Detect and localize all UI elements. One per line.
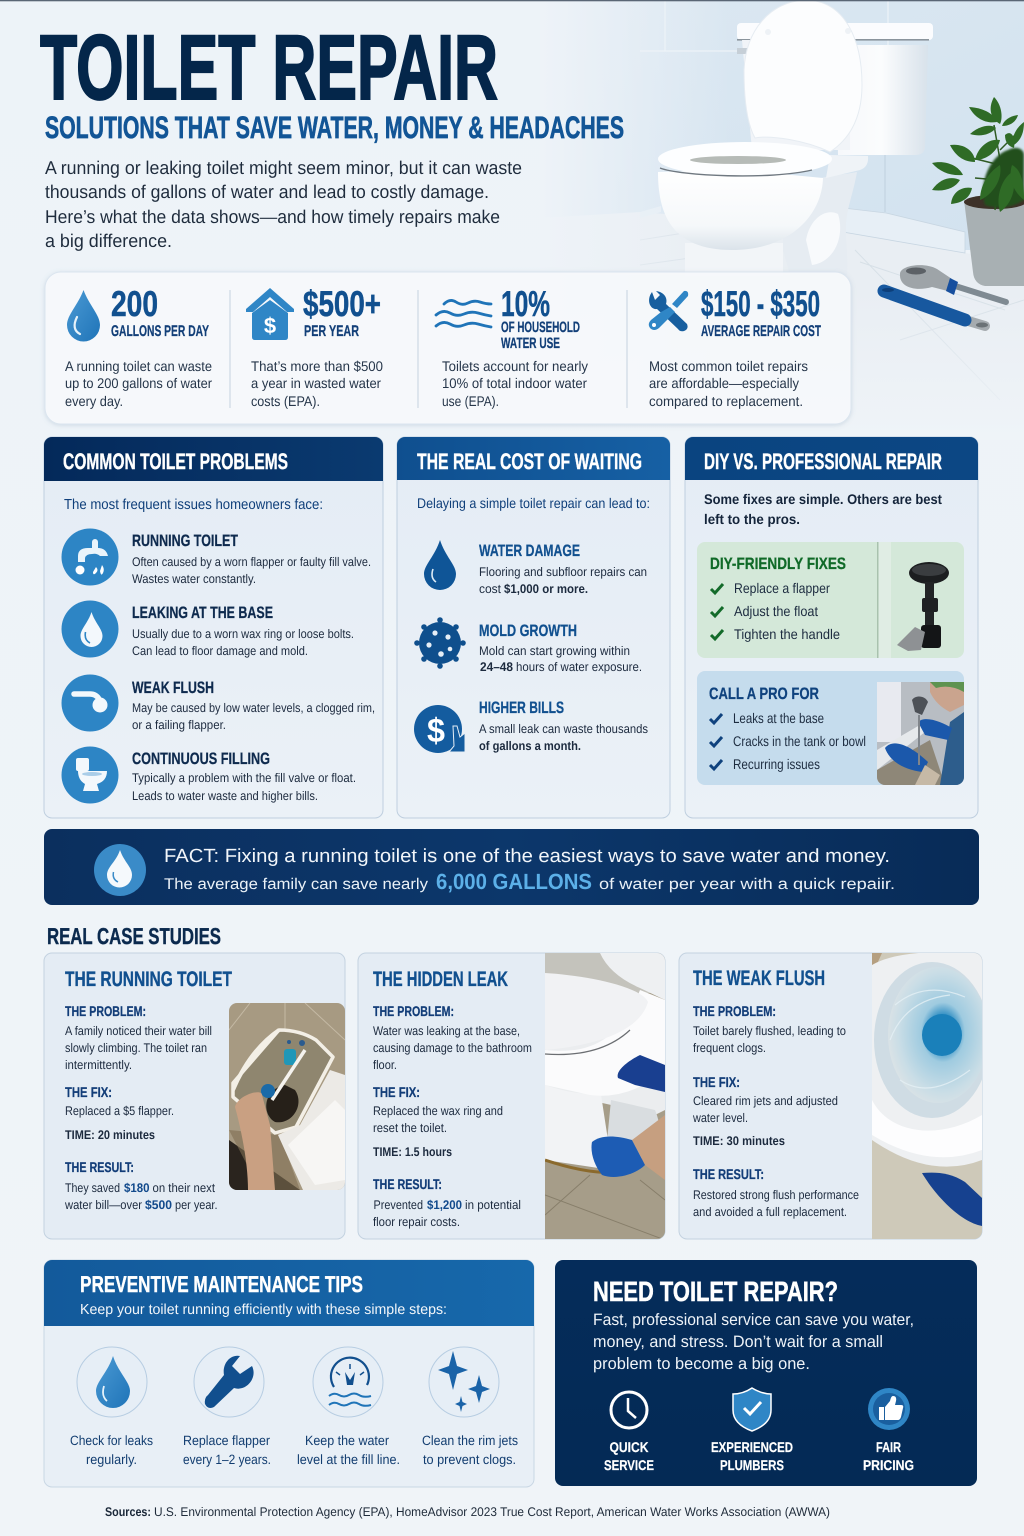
item: water damage	[424, 540, 647, 596]
tip: water level	[297, 1347, 400, 1467]
feature: fair pricing	[863, 1388, 914, 1473]
fact banner: The average family can save nearly	[164, 876, 428, 893]
stat: 10%: Toilets account for nearly	[442, 358, 588, 374]
tip: water level: Keep the water	[305, 1433, 389, 1448]
item: water damage: $1,000 or more.	[504, 582, 588, 596]
case study: the running toilet: $180	[124, 1181, 150, 1195]
feature: experienced plumbers: EXPERIENCED	[711, 1439, 793, 1455]
case study: the running toilet: slowly climbing. The toilet ran	[65, 1041, 207, 1055]
panel: call to action	[555, 1260, 977, 1486]
fact banner: FACT: Fixing a running toilet is one of the easiest ways to save water and money.	[164, 846, 890, 867]
tip: replace flapper	[183, 1347, 271, 1467]
stat: 10%: use (EPA).	[442, 393, 499, 409]
item: continuous filling: Leads to water waste and higher bills.	[132, 789, 318, 803]
tip: water level: level at the fill line.	[297, 1452, 400, 1467]
icon: mold spore	[414, 617, 466, 669]
item: mold growth: Mold can start growing within	[479, 644, 630, 658]
tip: replace flapper: Replace flapper	[183, 1433, 270, 1448]
case study: the weak flush: frequent clogs.	[693, 1041, 766, 1055]
panel: DIY vs professional: Some fixes are simple. Others are best	[704, 491, 942, 507]
stat: $500+: a year in wasted water	[251, 375, 381, 391]
case study: the hidden leak: Prevented	[374, 1198, 423, 1212]
icon: sparkles	[429, 1347, 499, 1417]
case study: the running toilet: A family noticed their water bill	[65, 1024, 212, 1038]
case study: the running toilet	[44, 953, 345, 1239]
fact banner: 6,000 GALLONS	[436, 869, 592, 894]
item: weak flush: WEAK FLUSH	[132, 679, 214, 697]
icon: dripping faucet	[62, 528, 118, 586]
tip: check for leaks: regularly.	[86, 1452, 137, 1467]
case study: the hidden leak: THE RESULT:	[373, 1176, 442, 1192]
item: continuous filling: CONTINUOUS FILLING	[132, 750, 270, 768]
feature: experienced plumbers	[711, 1388, 793, 1473]
box: DIY-friendly fixes: Tighten the handle	[734, 626, 840, 642]
feature: experienced plumbers: PLUMBERS	[720, 1457, 784, 1473]
wrenches	[882, 265, 1006, 328]
icon: drop	[424, 540, 456, 590]
case study: the hidden leak: floor.	[373, 1058, 397, 1072]
feature: quick service: QUICK	[610, 1439, 648, 1455]
stat: 10%: WATER USE	[501, 335, 560, 352]
case study: the running toilet: THE RUNNING TOILET	[65, 968, 232, 991]
item: higher bills: HIGHER BILLS	[479, 699, 564, 717]
icon: house with dollar: $	[264, 313, 276, 338]
stat: $500+: costs (EPA).	[251, 393, 320, 409]
panel: the real cost of waiting: Delaying a simple toilet repair can lead to:	[417, 495, 650, 511]
panel: call to action: problem to become a big one.	[593, 1355, 810, 1373]
case study: the weak flush: Cleared rim jets and adjusted	[693, 1094, 838, 1108]
box: DIY-friendly fixes: Replace a flapper	[734, 580, 830, 596]
case study: the weak flush: TIME: 30 minutes	[693, 1134, 785, 1148]
panel: common toilet problems: The most frequent issues homeowners face:	[64, 497, 323, 513]
panel: preventive maintenance tips	[44, 1260, 534, 1487]
case study: the running toilet: Replaced a $5 flapper.	[65, 1104, 174, 1118]
case study: the weak flush	[679, 952, 990, 1239]
box: call a pro	[697, 671, 964, 785]
item: running toilet: Wastes water constantly.	[132, 572, 256, 586]
intro paragraph: A running or leaking toilet might seem minor, but it can waste	[45, 157, 522, 178]
stat: $500+: That’s more than $500	[251, 358, 383, 374]
item: running toilet	[62, 528, 371, 586]
case study: the running toilet: THE PROBLEM:	[65, 1003, 146, 1019]
fact banner	[44, 829, 979, 905]
case study: the weak flush: and avoided a full replacement.	[693, 1205, 847, 1219]
case study: the running toilet: on their next	[152, 1181, 215, 1195]
item: higher bills: of gallons a month.	[479, 739, 581, 753]
tip: check for leaks: Check for leaks	[70, 1433, 153, 1448]
panel: common toilet problems	[44, 437, 383, 818]
tip: clean rim jets	[422, 1347, 518, 1467]
tip: clean rim jets: to prevent clogs.	[423, 1452, 516, 1467]
stat: $150-$350: are affordable—especially	[649, 375, 799, 391]
photo: plumber at work	[877, 682, 964, 785]
stat: $150-$350: AVERAGE REPAIR COST	[701, 323, 821, 340]
case study: the running toilet: THE RESULT:	[65, 1159, 134, 1175]
case study: the weak flush: THE FIX:	[693, 1074, 740, 1090]
case study: the hidden leak: $1,200	[427, 1198, 462, 1212]
case study: the hidden leak: TIME: 1.5 hours	[373, 1145, 452, 1159]
case study: the running toilet: TIME: 20 minutes	[65, 1128, 155, 1142]
case study: the weak flush: Toilet barely flushed, leading to	[693, 1024, 846, 1038]
case study: the running toilet: $500	[145, 1198, 172, 1212]
feature: quick service: SERVICE	[604, 1457, 654, 1473]
stat: 200 gallons: every day.	[65, 393, 123, 409]
item: higher bills: A small leak can waste thousands	[479, 722, 648, 736]
case study: the hidden leak: THE HIDDEN LEAK	[373, 968, 508, 991]
stat: 10%: OF HOUSEHOLD	[501, 319, 580, 336]
intro paragraph: Here’s what the data shows—and how timely repairs make	[45, 206, 500, 227]
item: water damage: cost	[479, 582, 501, 596]
item: mold growth	[414, 617, 642, 674]
item: leaking at base: Can lead to floor damage and mold.	[132, 644, 308, 658]
tip: replace flapper: every 1–2 years.	[183, 1452, 271, 1467]
fact banner: of water per year with a quick repaiir.	[599, 876, 895, 893]
case study: the hidden leak	[358, 953, 665, 1240]
item: mold growth: 24–48	[480, 660, 513, 674]
icon: waves	[436, 300, 491, 327]
title: TOILET REPAIR	[40, 17, 498, 119]
stat: 200 gallons: up to 200 gallons of water	[65, 375, 212, 391]
panel: call to action: Fast, professional service can save you water,	[593, 1311, 914, 1329]
heading: real case studies: REAL CASE STUDIES	[47, 923, 221, 949]
case study: the weak flush: Restored strong flush performance	[693, 1188, 859, 1202]
stat: $150-$350: compared to replacement.	[649, 393, 803, 409]
photo: leak at toilet base	[545, 953, 665, 1240]
sources footer: Sources:	[105, 1505, 151, 1519]
case study: the hidden leak: THE FIX:	[373, 1084, 420, 1100]
case study: the hidden leak: reset the toilet.	[373, 1121, 447, 1135]
icon: thumbs up	[868, 1388, 910, 1430]
box: call a pro: Recurring issues	[733, 756, 820, 772]
box: call a pro: CALL A PRO FOR	[709, 685, 819, 703]
icon: dollar with down arrow: $	[427, 712, 445, 750]
heading: THE REAL COST OF WAITING	[417, 449, 642, 474]
item: weak flush: or a failing flapper.	[132, 718, 226, 732]
stat: $500+: $500+	[303, 283, 381, 324]
stat: $150-$350: $150 - $350	[701, 283, 820, 324]
case study: the running toilet: They saved	[65, 1181, 120, 1195]
icon: flapper part	[897, 562, 949, 651]
heading: NEED TOILET REPAIR?	[593, 1276, 838, 1307]
plant	[932, 97, 1024, 286]
case study: the hidden leak: THE PROBLEM:	[373, 1003, 454, 1019]
icon: dollar with down arrow	[414, 705, 465, 753]
item: continuous filling: Typically a problem with the fill valve or float.	[132, 771, 356, 785]
intro paragraph	[45, 157, 522, 251]
intro paragraph: thousands of gallons of water and lead to costly damage.	[45, 181, 489, 202]
item: mold growth: MOLD GROWTH	[479, 622, 577, 640]
stat: $500+	[246, 283, 383, 409]
item: higher bills	[414, 699, 648, 753]
icon: drop	[62, 600, 118, 658]
icon: water drop	[67, 290, 100, 342]
icon: wrench	[194, 1347, 264, 1417]
stat: 10%	[436, 283, 588, 409]
panel: key statistics	[45, 272, 851, 424]
box: DIY-friendly fixes: Adjust the float	[734, 603, 818, 619]
icon: shield	[733, 1388, 771, 1431]
icon: flush lever	[62, 674, 118, 732]
subtitle: SOLUTIONS THAT SAVE WATER, MONEY & HEADACHES	[45, 110, 624, 145]
icon: crossed tools	[649, 291, 688, 331]
photo: swirling water in bowl	[872, 952, 990, 1239]
item: weak flush: May be caused by low water levels, a clogged rim,	[132, 701, 375, 715]
item: water damage: WATER DAMAGE	[479, 542, 580, 560]
heading: COMMON TOILET PROBLEMS	[63, 449, 288, 474]
case study: the hidden leak: Replaced the wax ring and	[373, 1104, 503, 1118]
case study: the hidden leak: in potential	[465, 1198, 521, 1212]
heading: PREVENTIVE MAINTENANCE TIPS	[80, 1271, 363, 1297]
icon: drop	[77, 1347, 147, 1417]
panel: DIY vs professional	[685, 437, 978, 818]
sources footer: U.S. Environmental Protection Agency (EPA), HomeAdvisor 2023 True Cost Report, American Water Works Association (AWWA)	[154, 1505, 830, 1519]
icon: toilet	[62, 746, 118, 804]
box: call a pro: Leaks at the base	[733, 710, 824, 726]
hero photo: bathroom with toilet	[611, 1, 1024, 381]
stat: $500+: PER YEAR	[304, 323, 359, 340]
icon: water drop badge	[94, 844, 146, 896]
box: DIY-friendly fixes	[697, 542, 964, 658]
toilet	[658, 0, 933, 276]
tip: clean rim jets: Clean the rim jets	[422, 1433, 518, 1448]
stat: 200 gallons: GALLONS PER DAY	[111, 323, 209, 340]
feature: fair pricing: PRICING	[863, 1457, 914, 1473]
box: DIY-friendly fixes: DIY-FRIENDLY FIXES	[710, 555, 846, 573]
item: leaking at base: LEAKING AT THE BASE	[132, 604, 273, 622]
box: call a pro: Cracks in the tank or bowl	[733, 733, 866, 749]
case study: the weak flush: THE WEAK FLUSH	[693, 967, 825, 990]
stat: 200 gallons: A running toilet can waste	[65, 358, 212, 374]
item: water damage: Flooring and subfloor repairs can	[479, 565, 647, 579]
panel: preventive maintenance tips: Keep your toilet running efficiently with these simple steps:	[80, 1302, 447, 1318]
feature: fair pricing: FAIR	[876, 1439, 901, 1455]
panel: call to action: money, and stress. Don’t wait for a small	[593, 1333, 883, 1351]
item: running toilet: RUNNING TOILET	[132, 532, 238, 550]
item: mold growth: hours of water exposure.	[516, 660, 642, 674]
panel: DIY vs professional: left to the pros.	[704, 511, 800, 527]
case study: the weak flush: THE RESULT:	[693, 1166, 764, 1182]
stat: 200 gallons	[65, 283, 212, 409]
case study: the hidden leak: floor repair costs.	[373, 1215, 460, 1229]
case study: the hidden leak: causing damage to the bathroom	[373, 1041, 532, 1055]
stat: 200 gallons: 200	[111, 283, 158, 324]
panel: the real cost of waiting	[397, 437, 670, 818]
feature: quick service	[604, 1392, 654, 1473]
case study: the hidden leak: Water was leaking at the base,	[373, 1024, 520, 1038]
case study: the running toilet: water bill—over	[64, 1198, 142, 1212]
case study: the running toilet: THE FIX:	[65, 1084, 112, 1100]
tip: check for leaks	[70, 1347, 153, 1467]
case study: the weak flush: water level.	[692, 1111, 748, 1125]
case study: the running toilet: per year.	[175, 1198, 218, 1212]
stat: $150-$350: Most common toilet repairs	[649, 358, 808, 374]
case study: the running toilet: intermittently.	[65, 1058, 132, 1072]
icon: clock	[611, 1392, 647, 1428]
stat: 10%: 10%	[501, 283, 550, 324]
stat: $150-$350	[649, 283, 821, 409]
stat: 10%: 10% of total indoor water	[442, 375, 587, 391]
item: running toilet: Often caused by a worn flapper or faulty fill valve.	[132, 555, 371, 569]
item: leaking at base	[62, 600, 354, 658]
item: continuous filling	[62, 746, 356, 804]
item: leaking at base: Usually due to a worn wax ring or loose bolts.	[132, 627, 354, 641]
case study: the weak flush: THE PROBLEM:	[693, 1003, 776, 1019]
photo: inside toilet tank	[229, 1003, 345, 1190]
item: weak flush	[62, 674, 375, 732]
icon: gauge and waves	[313, 1347, 383, 1417]
intro paragraph: a big difference.	[45, 230, 172, 251]
